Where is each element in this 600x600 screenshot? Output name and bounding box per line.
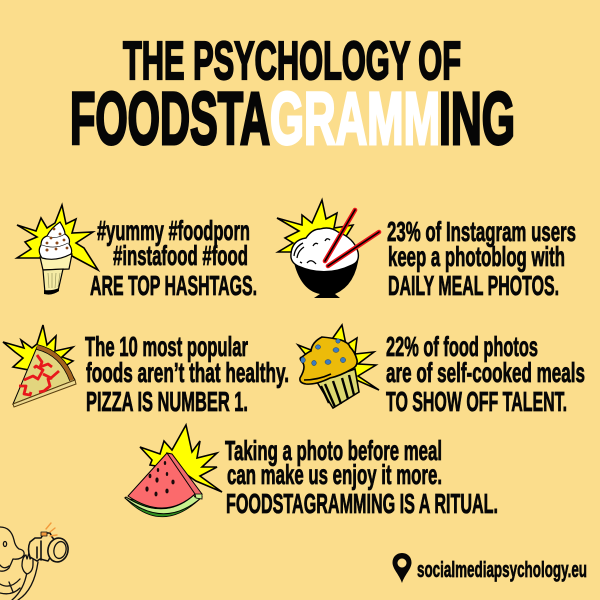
icon: rice bowl with chopsticks xyxy=(277,200,379,298)
title: GRAMM xyxy=(270,77,440,160)
panel: pizza xyxy=(3,325,289,417)
icon: pizza slice xyxy=(3,325,76,407)
icon: watermelon slice xyxy=(125,425,222,517)
text: hashtags: #instafood #food xyxy=(113,240,248,271)
icon: muffin xyxy=(298,325,379,408)
text: pizza fact: PIZZA IS NUMBER 1. xyxy=(86,386,248,417)
text: pizza fact xyxy=(85,331,289,417)
icon: cartoon person with camera xyxy=(0,523,70,600)
text: ritual fact: can make us enjoy it more. xyxy=(227,459,442,490)
title: ING xyxy=(439,77,515,160)
text: ritual fact xyxy=(225,435,498,519)
title: FOODSTA xyxy=(70,77,270,160)
text: pizza fact: foods aren’t that healthy. xyxy=(86,357,289,388)
title xyxy=(70,31,515,160)
text: pizza fact: The 10 most popular xyxy=(85,331,248,362)
text: self-cooked fact xyxy=(386,331,585,417)
text: ritual fact: Taking a photo before meal xyxy=(225,435,442,466)
icon: location pin xyxy=(392,553,412,583)
footer: website link xyxy=(392,553,587,583)
text: hashtags: #yummy #foodporn xyxy=(97,215,250,246)
panel: ritual xyxy=(125,425,498,519)
text: photoblog fact xyxy=(387,216,576,301)
panel: self-cooked meals xyxy=(298,325,585,417)
text: hashtags: ARE TOP HASHTAGS. xyxy=(90,270,257,301)
icon: ice cream cone xyxy=(17,205,98,295)
panel: daily meal photos xyxy=(277,200,576,301)
text: hashtags xyxy=(90,215,257,301)
panel: top hashtags xyxy=(17,205,257,301)
